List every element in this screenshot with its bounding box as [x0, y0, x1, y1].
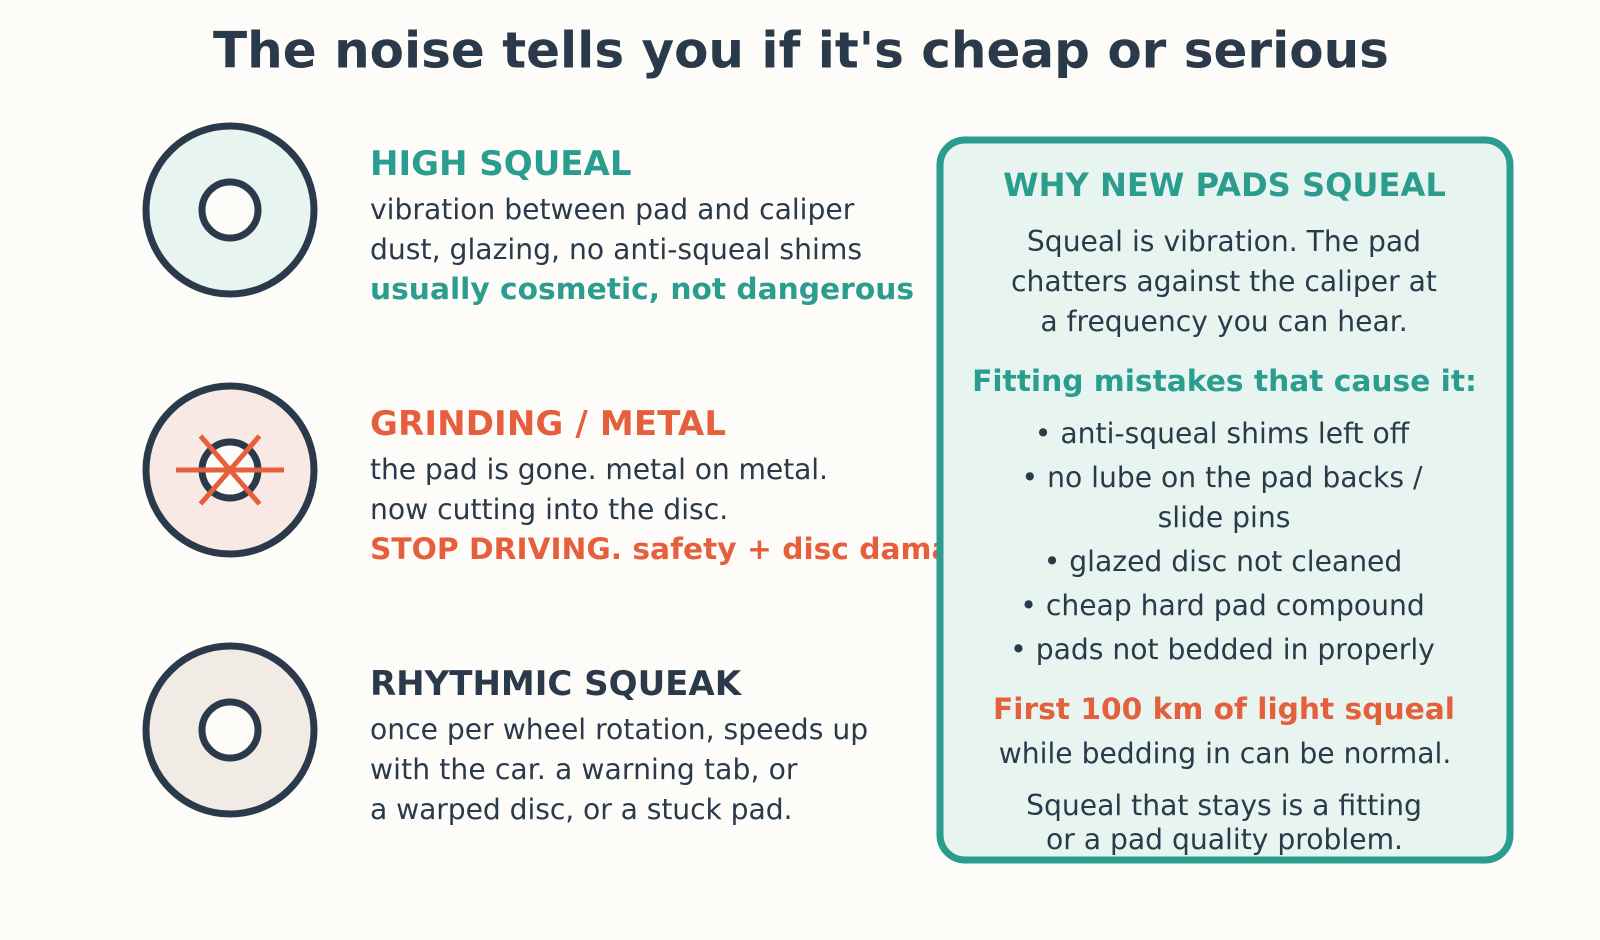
- heading: grinding: GRINDING / METAL: [370, 404, 726, 444]
- callout: first 100 km: First 100 km of light squeal: [993, 692, 1455, 727]
- heading: rhythmic squeak: RHYTHMIC SQUEAK: [370, 664, 743, 704]
- text: grinding details: STOP DRIVING. safety + disc damage: [370, 532, 993, 567]
- list: fitting mistakes: • cheap hard pad compound: [1020, 589, 1425, 622]
- panel intro text: [1011, 225, 1437, 338]
- closing text: Squeal that stays is a fitting: [1026, 789, 1422, 822]
- list: fitting mistakes: • pads not bedded in properly: [1010, 633, 1435, 666]
- text: high squeal details: [370, 193, 914, 307]
- text: rhythmic squeak details: once per wheel rotation, speeds up: [370, 713, 868, 746]
- closing text: while bedding in can be normal.: [999, 737, 1451, 770]
- title: The noise tells you if it's cheap or serious: [213, 22, 1389, 80]
- text: rhythmic squeak details: a warped disc, or a stuck pad.: [370, 793, 792, 826]
- text: grinding details: the pad is gone. metal on metal.: [370, 453, 828, 486]
- text: grinding details: now cutting into the disc.: [370, 493, 728, 526]
- icon: disc healthy: [146, 126, 314, 294]
- text: rhythmic squeak details: [370, 713, 868, 826]
- heading: high squeal: HIGH SQUEAL: [370, 144, 632, 184]
- icon: disc with red cross: [146, 386, 314, 554]
- closing text: or a pad quality problem.: [1046, 823, 1403, 856]
- panel intro text: chatters against the caliper at: [1011, 265, 1437, 298]
- panel intro text: Squeal is vibration. The pad: [1027, 225, 1421, 258]
- icon: disc neutral: [146, 646, 314, 814]
- list: fitting mistakes: • anti-squeal shims left off: [1035, 417, 1410, 450]
- row: rhythmic squeak: [146, 646, 868, 826]
- text: high squeal details: vibration between pad and caliper: [370, 193, 855, 226]
- text: high squeal details: dust, glazing, no anti-squeal shims: [370, 233, 862, 266]
- list: fitting mistakes: • no lube on the pad backs /: [1022, 461, 1423, 494]
- panel: why new pads squeal: [940, 140, 1510, 860]
- row: grinding: [146, 386, 993, 567]
- panel heading: WHY NEW PADS SQUEAL: [1003, 166, 1446, 204]
- text: high squeal details: usually cosmetic, not dangerous: [370, 272, 914, 307]
- row: high squeal: [146, 126, 914, 307]
- closing text: [999, 737, 1451, 856]
- list: fitting mistakes: • glazed disc not cleaned: [1044, 545, 1402, 578]
- list: fitting mistakes: [1010, 417, 1435, 666]
- panel intro text: a frequency you can hear.: [1040, 305, 1408, 338]
- text: grinding details: [370, 453, 993, 567]
- list: fitting mistakes: slide pins: [1158, 501, 1290, 534]
- subheading: fitting mistakes: Fitting mistakes that cause it:: [972, 364, 1477, 399]
- text: rhythmic squeak details: with the car. a warning tab, or: [370, 753, 798, 786]
